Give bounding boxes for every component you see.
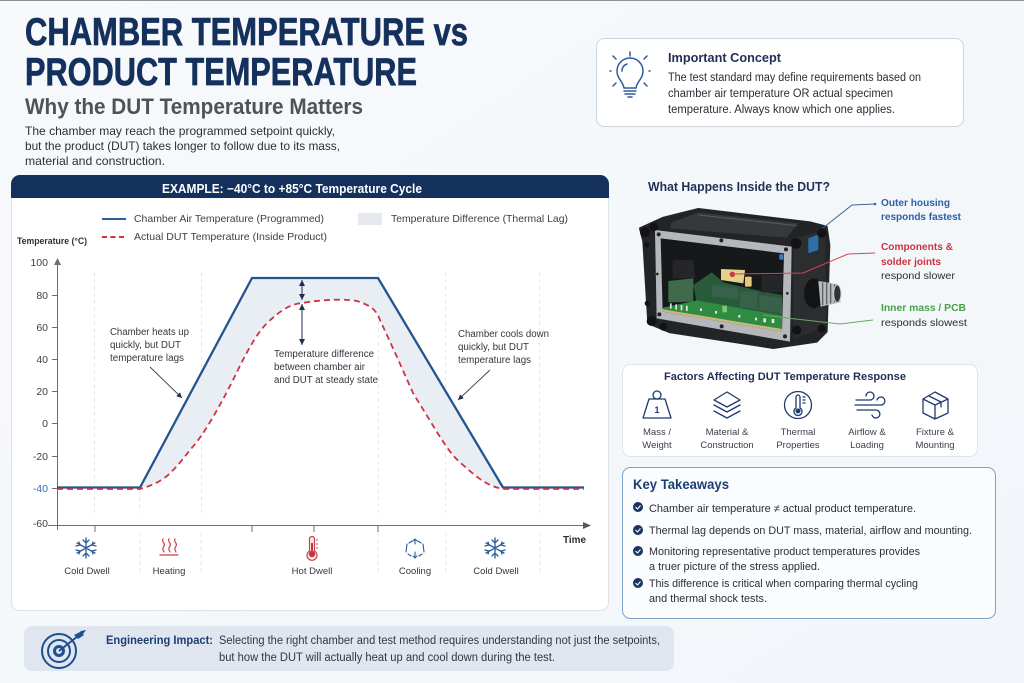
chart header: EXAMPLE: −40°C to +85°C Temperature Cycle xyxy=(162,182,422,196)
y axis labels: 0 xyxy=(42,418,48,430)
annotation: heating lag xyxy=(110,327,189,398)
annotation: heating lag: temperature lags xyxy=(110,353,184,364)
DUT temperature line xyxy=(57,300,584,489)
phase label: heating: Heating xyxy=(153,566,185,577)
intro text: The chamber may reach the programmed setpoint quickly, xyxy=(25,124,335,138)
takeaway 4: This difference is critical when comparing thermal cycling xyxy=(649,578,918,590)
title xyxy=(25,11,468,94)
annotation: cooling lag: quickly, but DUT xyxy=(458,342,529,353)
intro text xyxy=(25,124,340,168)
icon: target xyxy=(42,630,86,668)
icon: cold dwell snowflake 2 xyxy=(485,538,505,558)
annotation: heating lag: quickly, but DUT xyxy=(110,340,181,351)
icon: cooling arrows xyxy=(406,539,424,558)
annotation: cooling lag: temperature lags xyxy=(458,355,531,366)
y axis labels: 60 xyxy=(36,322,48,334)
callout: components and solder joints xyxy=(732,241,956,282)
factor: material: Material & xyxy=(706,427,749,438)
factors heading: Factors Affecting DUT Temperature Response xyxy=(664,371,906,383)
phase label: hot dwell: Hot Dwell xyxy=(292,566,332,577)
callout: inner mass xyxy=(763,302,967,329)
factor: thermal properties: Properties xyxy=(776,440,820,451)
y axis labels: 100 xyxy=(30,257,48,269)
impact text: Selecting the right chamber and test method requires understanding not just the setpoints, xyxy=(219,635,660,647)
phase label: cold dwell 2: Cold Dwell xyxy=(473,566,519,577)
callout: inner mass: responds slowest xyxy=(881,317,967,329)
panel: factors affecting DUT temperature response xyxy=(622,364,978,456)
impact text xyxy=(219,635,660,664)
thermal lag shaded area xyxy=(140,278,503,488)
factor: mass: Weight xyxy=(642,440,672,451)
illustration: DUT enclosure cutaway xyxy=(640,209,841,348)
y axis labels: 40 xyxy=(36,354,48,366)
annotation: steady state difference: and DUT at steady state xyxy=(274,375,378,386)
factor: airflow xyxy=(848,392,886,451)
icon: hot dwell thermometer xyxy=(307,536,318,560)
intro text: but the product (DUT) takes longer to follow due to its mass, xyxy=(25,139,340,153)
legend: Temperature Difference (Thermal Lag) xyxy=(391,213,568,225)
annotation: steady state difference: Temperature difference xyxy=(274,349,374,360)
concept text: temperature. Always know which one applies. xyxy=(668,104,895,116)
takeaway 3: a truer picture of the stress applied. xyxy=(649,561,820,573)
icon: light bulb xyxy=(610,52,650,97)
axes xyxy=(48,258,591,532)
takeaway 1: Chamber air temperature ≠ actual product temperature. xyxy=(649,503,916,515)
callout: components and solder joints: solder joints xyxy=(881,256,941,268)
callout: outer housing xyxy=(823,197,961,228)
annotation: cooling lag xyxy=(458,329,549,400)
factor: material xyxy=(700,392,754,451)
factor: thermal properties: Thermal xyxy=(781,427,815,438)
annotation: cooling lag: Chamber cools down xyxy=(458,329,549,340)
takeaway 3: Monitoring representative product temperatures provides xyxy=(649,546,920,558)
panel: important concept xyxy=(596,38,964,126)
panel: temperature cycle chart xyxy=(11,175,609,610)
y axis labels: -60 xyxy=(33,518,48,530)
factor: mass: Mass / xyxy=(643,427,671,438)
impact text: but how the DUT will actually heat up and cool down during the test. xyxy=(219,652,555,664)
factor: material: Construction xyxy=(700,440,754,451)
callout: inner mass: Inner mass / PCB xyxy=(881,302,966,314)
y axis labels: 80 xyxy=(36,290,48,302)
callout: outer housing: Outer housing xyxy=(881,197,950,209)
y axis labels: -20 xyxy=(33,451,48,463)
concept text: The test standard may define requirements based on xyxy=(668,72,921,84)
heading: what happens inside the DUT: What Happens Inside the DUT? xyxy=(648,180,830,194)
chamber air temperature line xyxy=(57,278,584,488)
title: CHAMBER TEMPERATURE vs xyxy=(25,11,468,54)
annotation: heating lag: Chamber heats up xyxy=(110,327,189,338)
intro text: material and construction. xyxy=(25,154,165,168)
factor: thermal properties xyxy=(776,392,820,451)
icon: heating waves xyxy=(160,539,178,555)
takeaway 2: Thermal lag depends on DUT mass, material, airflow and mounting. xyxy=(649,525,972,537)
callout: outer housing: responds fastest xyxy=(881,211,961,223)
chart header xyxy=(11,175,609,198)
callout: components and solder joints: respond slower xyxy=(881,270,956,282)
concept heading: Important Concept xyxy=(668,50,782,65)
legend xyxy=(102,213,568,243)
callout: components and solder joints: Components & xyxy=(881,241,953,253)
icon: cold dwell snowflake xyxy=(76,538,96,558)
panel: engineering impact xyxy=(24,626,674,671)
x axis title: Time xyxy=(563,534,586,546)
impact label: Engineering Impact: xyxy=(106,635,213,647)
annotation: steady state difference xyxy=(274,280,378,386)
takeaways heading: Key Takeaways xyxy=(633,476,729,492)
y axis title: Temperature (°C) xyxy=(17,236,87,247)
concept text xyxy=(668,72,921,116)
factor: mass: 1 xyxy=(654,405,660,415)
takeaway 4 xyxy=(633,578,918,605)
concept text: chamber air temperature OR actual specimen xyxy=(668,88,893,100)
legend: Chamber Air Temperature (Programmed) xyxy=(134,213,324,225)
factor: mass xyxy=(642,391,672,451)
factor: airflow: Airflow & xyxy=(848,427,886,438)
takeaway 4: and thermal shock tests. xyxy=(649,593,767,605)
phase label: cooling: Cooling xyxy=(399,566,431,577)
takeaway 3 xyxy=(633,546,920,573)
y axis labels: -40 xyxy=(33,483,48,495)
phase label: cold dwell: Cold Dwell xyxy=(64,566,110,577)
annotation: steady state difference: between chamber air xyxy=(274,362,366,373)
y axis labels xyxy=(30,257,48,530)
subtitle: Why the DUT Temperature Matters xyxy=(25,94,363,119)
legend: Actual DUT Temperature (Inside Product) xyxy=(134,231,327,243)
panel: key takeaways xyxy=(622,468,996,618)
factor: airflow: Loading xyxy=(850,440,884,451)
factor: fixture: Fixture & xyxy=(916,427,955,438)
title: PRODUCT TEMPERATURE xyxy=(25,51,417,94)
factor: fixture xyxy=(915,392,955,451)
factor: fixture: Mounting xyxy=(915,440,955,451)
y axis labels: 20 xyxy=(36,386,48,398)
